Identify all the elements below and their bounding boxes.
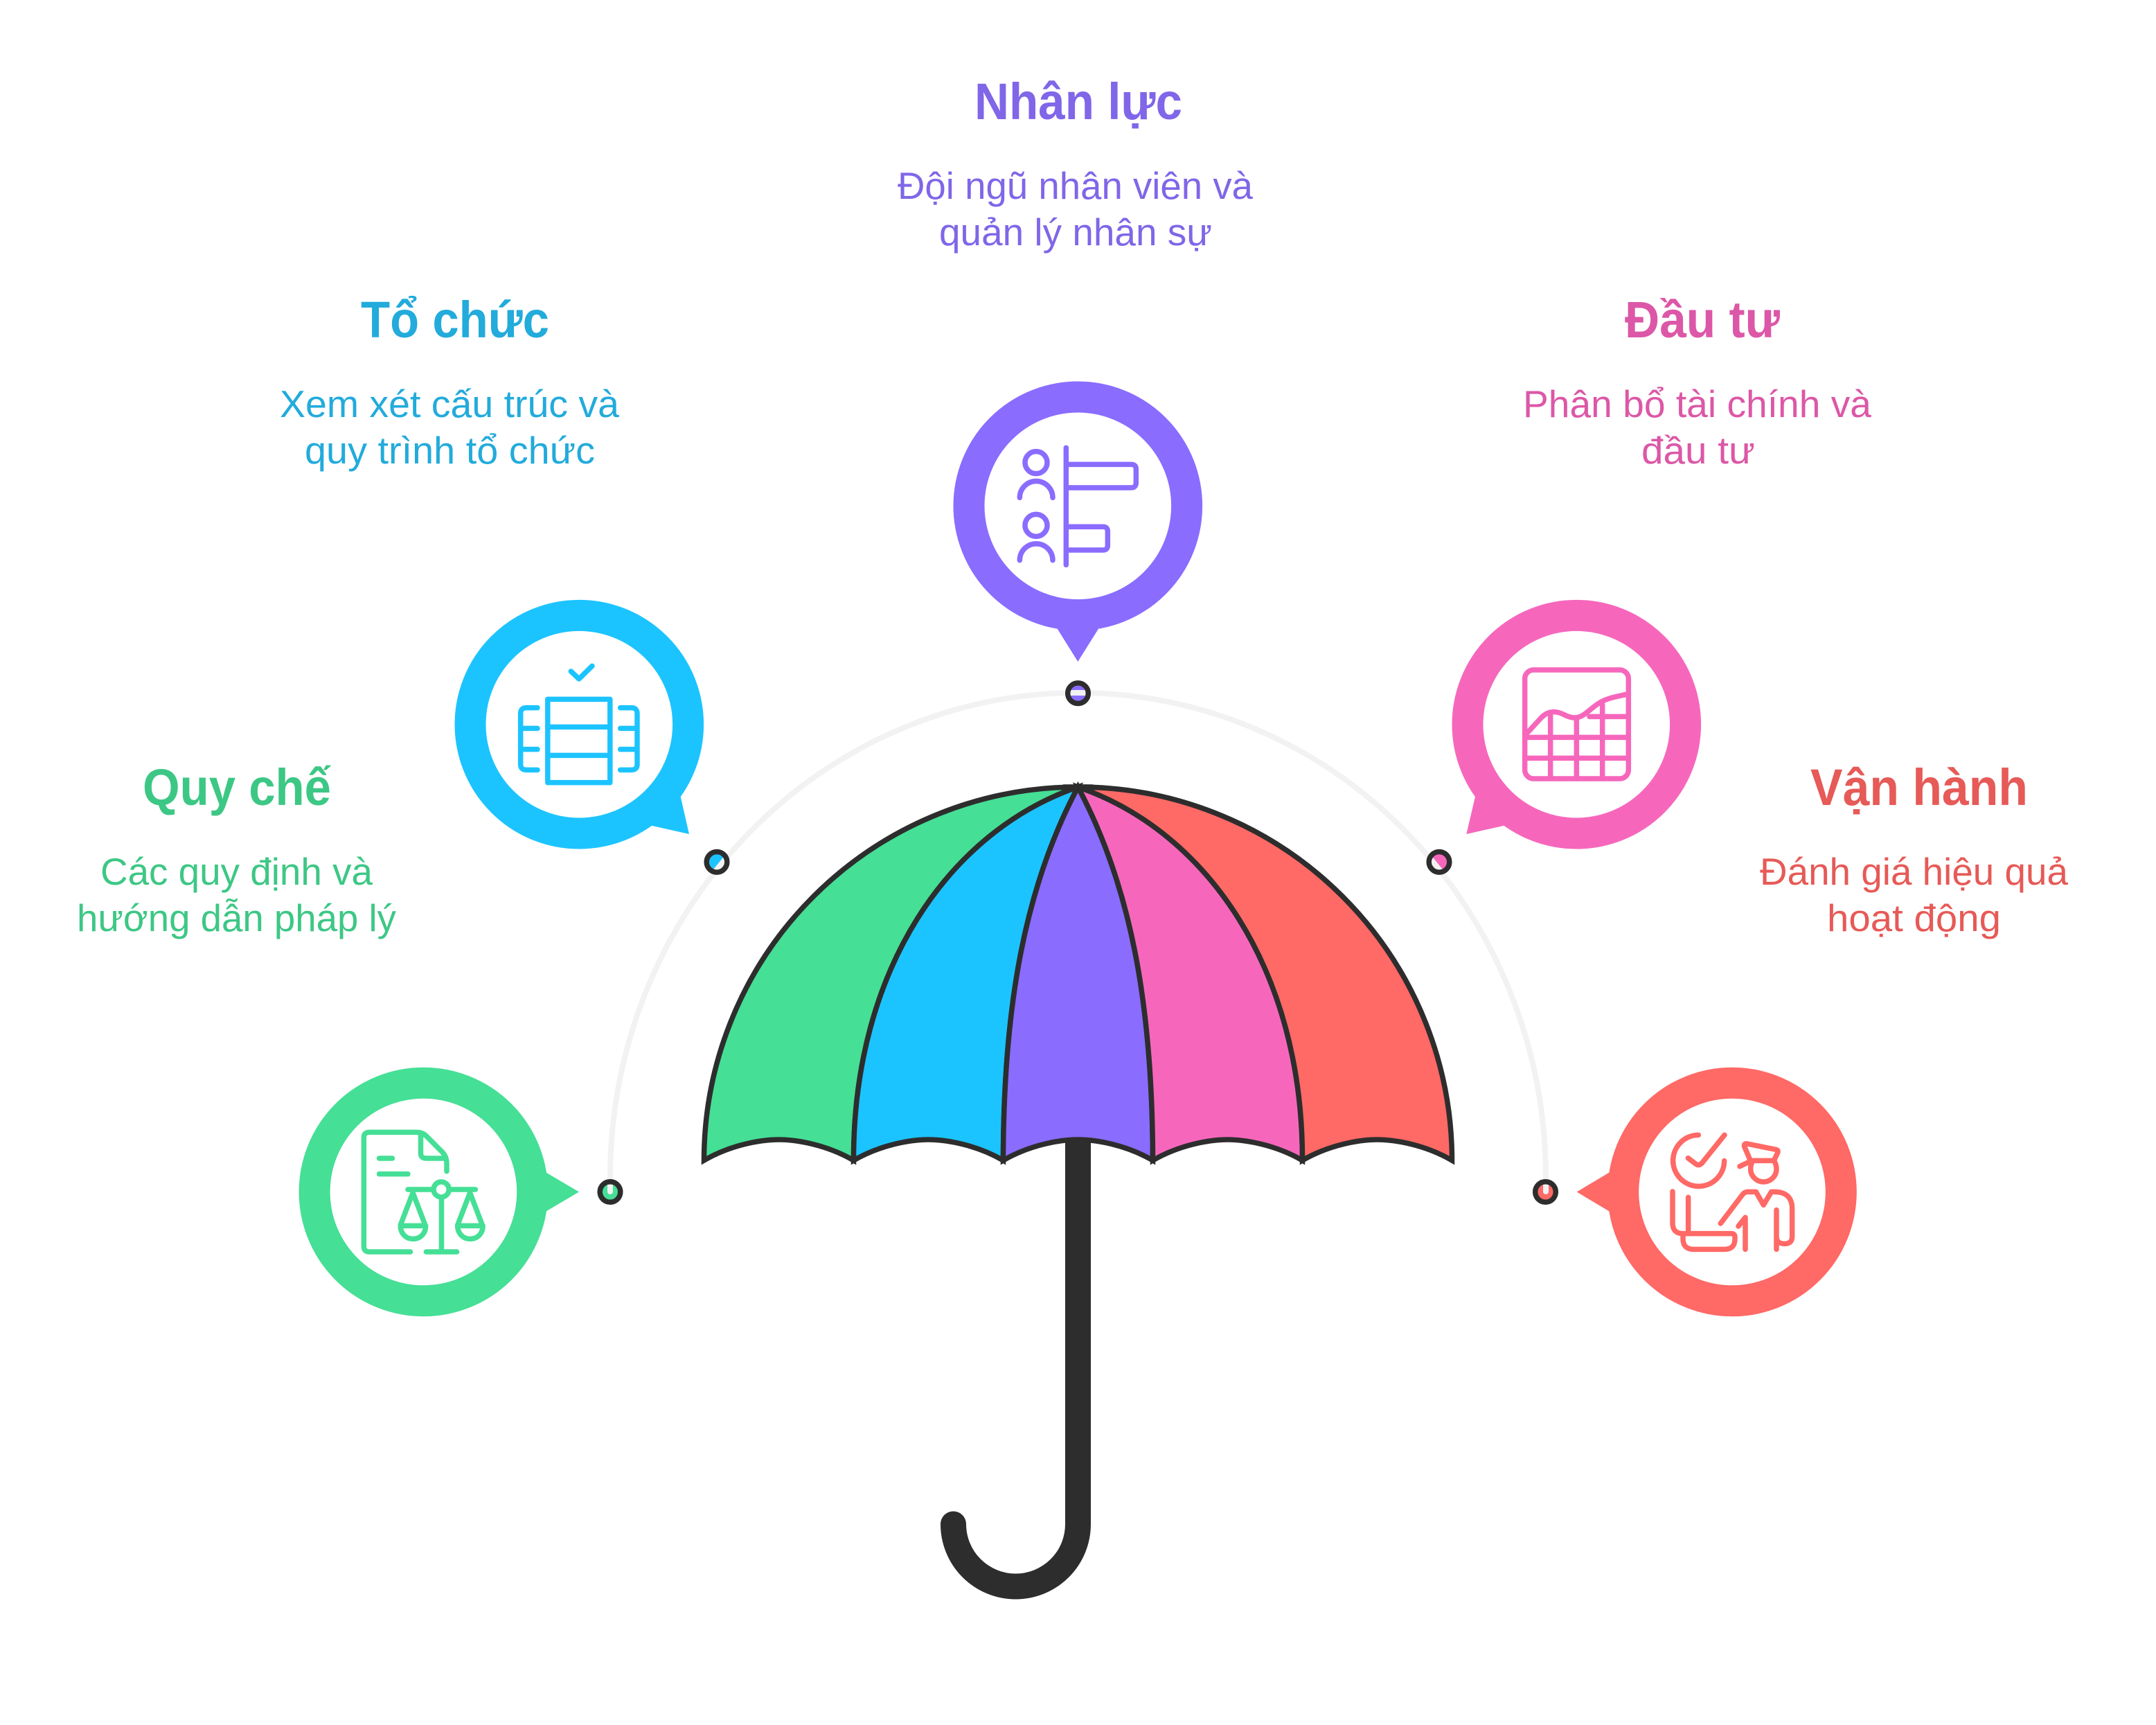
text: Vận hành description xyxy=(1760,850,2068,939)
icon: chart on grid xyxy=(1525,670,1628,779)
text: Quy chế description: hướng dẫn pháp lý xyxy=(77,896,396,939)
umbrella shaft and handle xyxy=(953,1143,1078,1586)
text: Đầu tư description xyxy=(1523,382,1871,472)
text: Đầu tư description: Phân bổ tài chính và xyxy=(1523,382,1871,425)
text: Tổ chức description: quy trình tổ chức xyxy=(305,429,595,472)
text: Tổ chức description xyxy=(280,382,619,472)
text: Nhân lực description: Đội ngũ nhân viên và xyxy=(898,164,1253,207)
heading: Vận hành: Vận hành xyxy=(1810,759,2028,816)
text: Nhân lực description: quản lý nhân sự xyxy=(939,211,1212,254)
text: Tổ chức description: Xem xét cấu trúc và xyxy=(280,382,619,425)
connector dot rings xyxy=(600,683,1556,1202)
text: Quy chế description: Các quy định và xyxy=(100,850,373,893)
connector dot fills xyxy=(601,684,1554,1201)
heading: Quy chế: Quy chế xyxy=(143,759,332,816)
panel: Tổ chức badge xyxy=(470,615,689,834)
text: Vận hành description: hoạt động xyxy=(1827,896,2001,939)
heading: Nhân lực: Nhân lực xyxy=(974,73,1182,130)
panel: Đầu tư badge xyxy=(1466,615,1686,834)
icon: document and scales xyxy=(364,1132,483,1252)
panel: Vận hành badge xyxy=(1577,1083,1841,1301)
icon: people and bars xyxy=(1019,448,1136,565)
text: Đầu tư description: đầu tư xyxy=(1641,429,1755,472)
connector arc xyxy=(610,693,1546,1192)
icon: structure table with check xyxy=(521,666,637,783)
panel: Nhân lực badge xyxy=(969,397,1187,662)
umbrella canopy xyxy=(704,787,1452,1160)
text: Quy chế description xyxy=(77,850,396,939)
text: Vận hành description: Đánh giá hiệu quả xyxy=(1760,850,2068,893)
heading: Tổ chức: Tổ chức xyxy=(361,291,549,348)
panel: Quy chế badge xyxy=(314,1083,579,1301)
text: Nhân lực description xyxy=(898,164,1253,254)
heading: Đầu tư: Đầu tư xyxy=(1625,291,1780,348)
icon: officer and checkmark xyxy=(1673,1135,1792,1249)
